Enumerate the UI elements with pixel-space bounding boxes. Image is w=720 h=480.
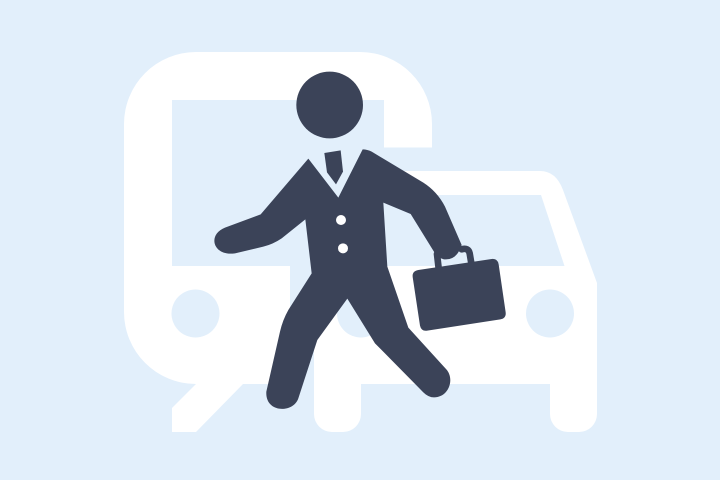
jacket button top (336, 215, 346, 225)
icon: bus (124, 52, 432, 432)
suit, arms and legs (214, 149, 462, 409)
head (296, 72, 363, 138)
jacket button bottom (338, 243, 348, 253)
briefcase (413, 259, 506, 331)
icon: car (314, 171, 597, 432)
necktie (324, 150, 343, 184)
icon: businessman (214, 72, 506, 409)
briefcase handle (437, 249, 471, 268)
